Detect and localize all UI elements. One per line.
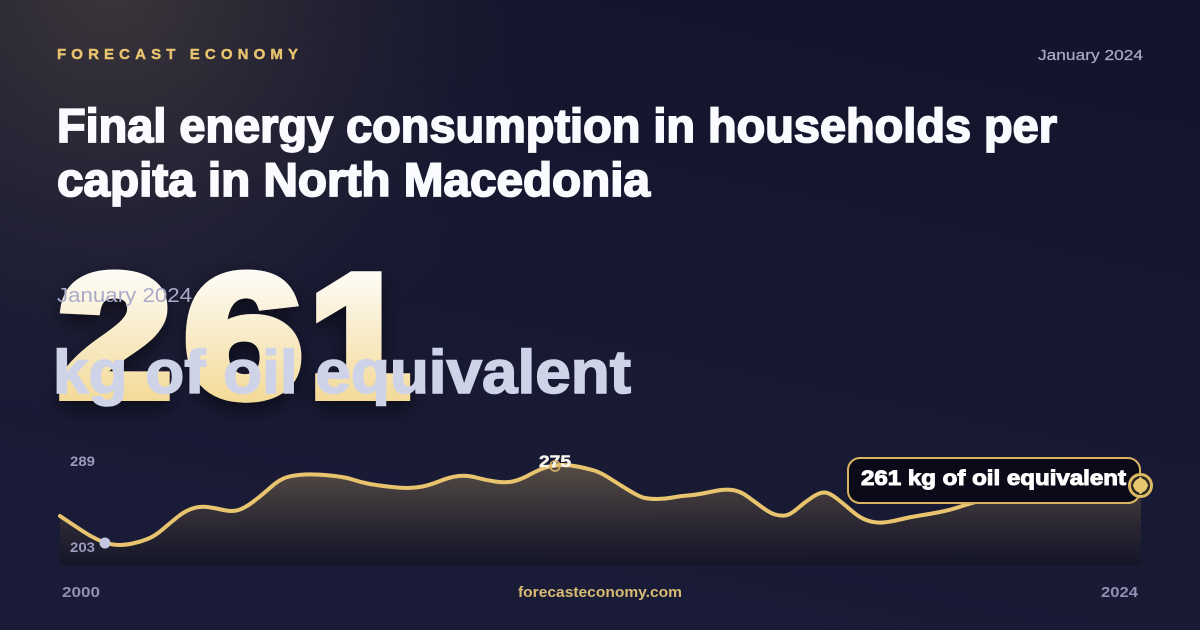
title: Final energy consumption in households per <box>57 99 1057 152</box>
big number 261: 6 <box>184 238 303 433</box>
callout: 261 kg of oil equivalent <box>861 467 1126 490</box>
start year: 2000 <box>62 585 100 601</box>
big number 261 <box>58 238 410 433</box>
chart area fill <box>60 465 1141 565</box>
big number 261: 1 <box>309 238 410 433</box>
minimum marker <box>100 538 110 548</box>
date top right: January 2024 <box>1038 47 1143 64</box>
site url: forecasteconomy.com <box>518 585 682 601</box>
axis max label: 289 <box>70 454 95 469</box>
peak value label: 275 <box>539 453 571 471</box>
chart line <box>60 465 1140 545</box>
end marker <box>1130 474 1152 496</box>
title <box>57 99 1057 206</box>
end year: 2024 <box>1101 585 1138 601</box>
callout <box>848 458 1140 503</box>
brand label: FORECAST ECONOMY <box>57 46 298 63</box>
area chart <box>60 453 1152 565</box>
big number 261: 2 <box>58 238 172 433</box>
unit label: kg of oil equivalent <box>53 338 631 406</box>
date under number: January 2024 <box>57 285 192 307</box>
peak marker <box>550 461 560 471</box>
title: capita in North Macedonia <box>57 153 651 206</box>
axis min label: 203 <box>70 540 96 555</box>
